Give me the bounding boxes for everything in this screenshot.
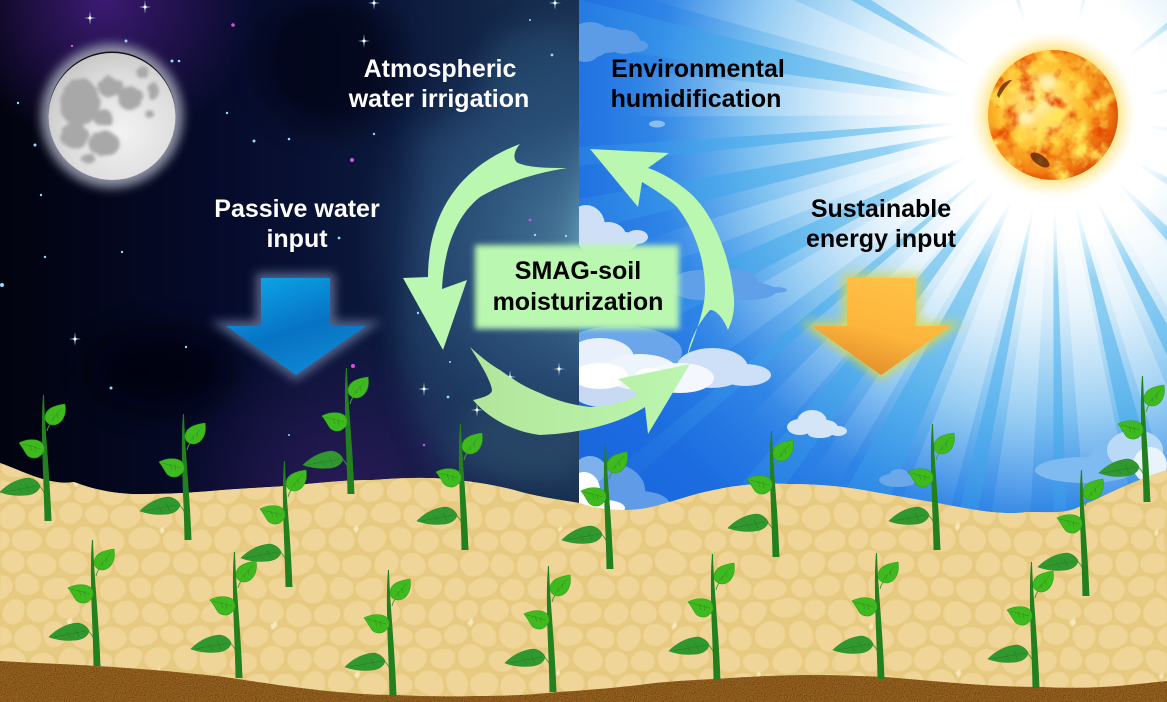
heading: atmospheric water irrigation: Atmospheric: [364, 55, 516, 83]
plant row: upper: [0, 368, 1164, 596]
night sky panel: [0, 0, 579, 503]
plant 12: [191, 552, 256, 678]
heading: sustainable energy input: Sustainable: [811, 195, 951, 223]
brown ground layer: [0, 661, 1167, 702]
central label: SMAG-soil moisturization: SMAG-soil: [515, 257, 641, 285]
central label: SMAG-soil moisturization: [475, 245, 679, 329]
cloud: upper behind label: [579, 205, 648, 250]
arrow: lower, curving right: [470, 347, 690, 435]
central label: SMAG-soil moisturization: moisturization: [493, 288, 663, 316]
plant 7: [728, 431, 793, 557]
plant 4: [241, 461, 306, 587]
heading: atmospheric water irrigation: water irrigation: [348, 85, 529, 113]
plant 16: [833, 553, 898, 679]
plant 8: [889, 424, 954, 550]
plant 6: [562, 443, 627, 569]
plant 11: [49, 540, 114, 666]
cloud: top left: [579, 22, 648, 62]
plant 2: [140, 414, 205, 540]
arrow: passive water input, blue: [226, 278, 366, 375]
plant row: lower: [49, 540, 1053, 696]
cloud: lower left: [579, 456, 670, 510]
plant 14: [505, 566, 570, 692]
plant 17: [988, 562, 1053, 688]
daytime sky panel with sun rays: [579, 0, 1167, 514]
cloud: faded right of label: [670, 269, 787, 300]
heading: passive water input: input: [266, 225, 328, 253]
plant 5: [417, 424, 482, 550]
soil layer: [0, 450, 1167, 702]
heading: sustainable energy input: energy input: [806, 225, 957, 253]
moon: [41, 44, 183, 188]
plant 3: [303, 368, 368, 494]
plant 15: [669, 554, 734, 680]
heading: passive water input: Passive water: [214, 195, 380, 223]
plant 13: [345, 570, 410, 696]
plant 10: [1099, 376, 1164, 502]
cloud: tiny: [649, 120, 665, 128]
arrow: sustainable energy input, orange: [812, 278, 951, 375]
plant 1: [0, 395, 65, 521]
arrow: atmospheric water irrigation, curving down: [403, 144, 567, 350]
heading: environmental humidification: humidification: [611, 85, 781, 113]
plant 9: [1038, 470, 1103, 596]
cloud: low centre-right: [879, 469, 917, 487]
cloud: small mid: [787, 410, 847, 438]
cloud: large white: [579, 326, 771, 407]
sun: [969, 31, 1137, 199]
heading: environmental humidification: Environmental: [611, 55, 785, 83]
cloud: lower right: [1035, 430, 1167, 483]
arrow: environmental humidification, curving up: [590, 149, 734, 357]
